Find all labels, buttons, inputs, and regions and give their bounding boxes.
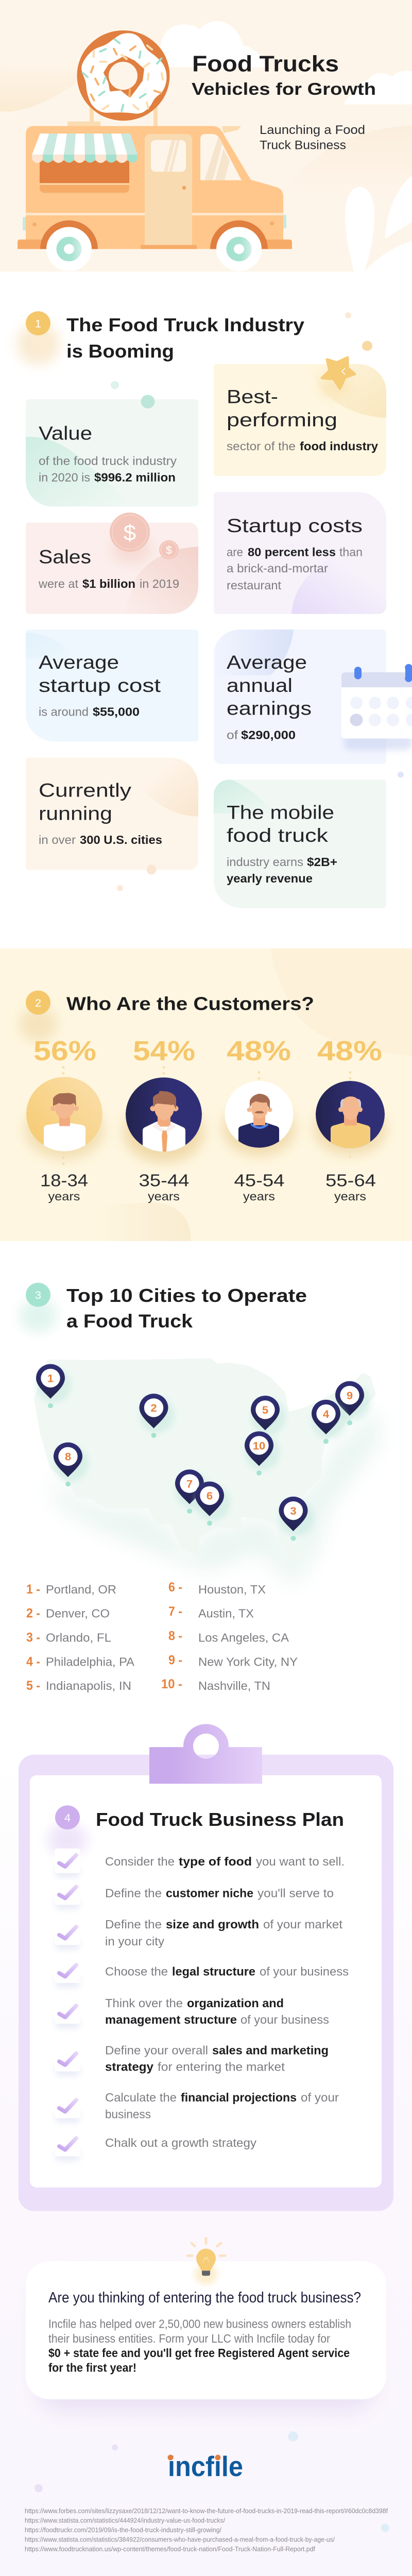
icon: calendar (341, 664, 412, 750)
connector dots (62, 1066, 65, 1165)
legend: cities 1-5: 3 - (26, 1631, 40, 1645)
checklist item 5 (55, 1997, 329, 2028)
card heading: running (39, 803, 112, 824)
panel: value (26, 395, 198, 506)
item text (105, 1997, 329, 2027)
card text: of (227, 729, 238, 742)
visor (222, 126, 241, 133)
card text: in over (39, 834, 76, 847)
connector dots (349, 1071, 351, 1158)
item text: type of food (179, 1855, 252, 1869)
section 1 number badge (16, 311, 60, 365)
card text (39, 706, 140, 719)
cab window (200, 134, 242, 180)
body copy (48, 2318, 351, 2375)
card heading (39, 651, 161, 696)
legend: cities 6-10: Houston, TX (198, 1583, 266, 1597)
pin: 8 Los Angeles (54, 1443, 89, 1486)
section 4 number badge (48, 1805, 87, 1857)
card text: of the food truck industry (39, 455, 177, 468)
pin: 2 Denver (139, 1394, 174, 1438)
decorative dot (398, 772, 404, 777)
card text: in 2020 is (39, 471, 90, 484)
panel: customers background (0, 948, 412, 1241)
panel: sales (26, 513, 198, 614)
pin: 7 Austin (175, 1469, 210, 1514)
card background (26, 399, 198, 506)
item text: financial projections (181, 2091, 297, 2105)
card text: restaurant (227, 579, 281, 592)
icon: large coin (110, 513, 151, 563)
card background (214, 630, 386, 764)
card shadow (36, 2279, 376, 2412)
card text (39, 455, 177, 484)
body copy: for the first year! (48, 2362, 136, 2375)
checkbox (55, 1880, 80, 1909)
card text: $2B+ (307, 856, 337, 869)
section 1 heading: is Booming (66, 341, 174, 362)
item text: Define the (105, 1918, 162, 1931)
awning scallops (32, 155, 138, 163)
legend: cities 1-5: 5 - (26, 1679, 40, 1693)
pin: 5 Indianapolis (251, 1396, 286, 1435)
checkbox (55, 1958, 80, 1988)
pin: 6 Houston (195, 1482, 230, 1526)
checkbox (55, 1849, 80, 1878)
legend: cities 1-5: 4 - (26, 1655, 40, 1669)
pin: 9 New York City: 9 (347, 1389, 353, 1402)
section 1 heading (66, 315, 305, 362)
pin: 10 Nashville: 10 (253, 1439, 265, 1452)
checklist item 4 (55, 1958, 349, 1988)
card heading: performing (227, 409, 337, 430)
lower page background (0, 1757, 412, 2576)
rear wheel (40, 221, 98, 271)
item text: legal structure (172, 1965, 255, 1978)
item text: in your city (105, 1935, 164, 1948)
background hill left (0, 60, 90, 112)
donut sign (77, 30, 170, 121)
cloud right (344, 71, 412, 105)
percentage: 54% (133, 1036, 195, 1066)
food truck illustration (18, 30, 292, 271)
cloud behind title (161, 21, 269, 67)
source links: https://www.statista.com/statistics/384922/consumers-who-have-purchased-a-meal-from-a-food-truck-by-age-us/ (25, 2536, 335, 2544)
panel: mobile food truck (214, 779, 386, 908)
card heading (39, 779, 131, 824)
item text: of your business (241, 2013, 329, 2027)
title: Food Trucks (192, 52, 339, 76)
background blob (98, 1202, 191, 1241)
pin: 10 Nashville (245, 1431, 280, 1476)
card background (214, 779, 386, 908)
card blob (214, 780, 264, 813)
card background (214, 364, 386, 476)
legend: cities 6-10: 10 - (161, 1677, 182, 1691)
checkbox (55, 2132, 80, 2161)
legend: cities 1-5: Portland, OR (46, 1583, 116, 1597)
card heading (227, 386, 337, 430)
checklist item 2 (55, 1880, 334, 1909)
item text: business (105, 2108, 151, 2121)
card background (26, 757, 198, 870)
card blob (237, 630, 294, 675)
subtitle: Truck Business (260, 139, 346, 152)
pin: 8 Los Angeles: 8 (65, 1450, 71, 1463)
source links (25, 2507, 388, 2553)
icon: star (319, 358, 355, 397)
logo: incfile: incfile (168, 2451, 243, 2482)
source links: https://foodtruckr.com/2019/09/is-the-food-truck-industry-still-growing/ (25, 2526, 221, 2534)
age label (40, 1172, 88, 1204)
awning stripes (32, 133, 138, 155)
item text: you want to sell. (256, 1855, 345, 1869)
bumper lights and rivets (18, 215, 292, 249)
item text: strategy (105, 2061, 154, 2074)
card heading: Currently (39, 779, 131, 801)
card background (26, 630, 198, 741)
item text: of your business (260, 1965, 349, 1978)
section 2 number badge: 2 (35, 996, 41, 1009)
legend: cities 6-10: 9 - (168, 1653, 182, 1667)
card text: industry earns (227, 856, 303, 869)
pin: 7 Austin: 7 (186, 1478, 193, 1490)
checklist item 1 (55, 1849, 345, 1878)
decorative leaves (345, 176, 412, 272)
section 1 number badge: 1 (35, 317, 41, 330)
background hill right (286, 126, 412, 272)
panel: average annual earnings (214, 630, 386, 764)
item text: Think over the (105, 1997, 183, 2010)
card text: $290,000 (241, 729, 296, 742)
card heading: Value (39, 422, 92, 444)
card text (38, 578, 179, 591)
title: Vehicles for Growth (192, 80, 376, 99)
age label: years (148, 1190, 180, 1204)
item text: you'll serve to (258, 1887, 334, 1900)
item text (105, 2091, 339, 2121)
card text (227, 856, 337, 886)
card heading: Average (227, 651, 307, 673)
legend: cities 6-10 (161, 1580, 298, 1693)
age label: 35-44 (139, 1172, 190, 1191)
pin: 1 Portland: 1 (47, 1372, 54, 1385)
sprinkles (83, 39, 163, 111)
item text: customer niche (166, 1887, 253, 1900)
section 3 number badge (20, 1283, 57, 1332)
background curve (271, 948, 412, 1056)
avatar shadow (124, 1102, 204, 1162)
body copy: Incfile has helped over 2,50,000 new business owners establish (48, 2318, 351, 2331)
card blob (26, 437, 111, 506)
checklist item 3 (55, 1918, 342, 1950)
card blob (321, 364, 386, 418)
legend: cities 6-10: 7 - (168, 1604, 182, 1619)
card heading (227, 651, 312, 719)
card blob (291, 572, 377, 614)
legend: cities 1-5: Denver, CO (46, 1607, 110, 1621)
service window (40, 161, 129, 183)
item text: Define the (105, 1887, 162, 1900)
card background (26, 522, 198, 614)
decorative dots (111, 312, 372, 389)
item text: Define your overall (105, 2044, 208, 2057)
legend: cities 1-5 (26, 1582, 134, 1693)
front wheel (210, 221, 268, 271)
card text: 300 U.S. cities (80, 834, 162, 847)
percentage: 56% (33, 1036, 96, 1066)
item text (105, 1855, 345, 1869)
age label: years (48, 1190, 80, 1204)
map of the United States (34, 1358, 381, 1586)
section 4 number badge: 4 (64, 1811, 71, 1824)
panel: best-performing (214, 358, 386, 476)
item text: Chalk out a growth strategy (105, 2137, 256, 2150)
counter (40, 183, 129, 193)
connector dots (163, 1066, 165, 1075)
checklist item 6 (55, 2044, 329, 2076)
map shadow (50, 1406, 381, 1586)
card text: food industry (300, 440, 379, 453)
panel: average startup cost (26, 630, 198, 741)
item text (105, 1887, 334, 1900)
avatar (225, 1081, 294, 1148)
legend: cities 1-5: Orlando, FL (46, 1632, 111, 1645)
checklist item 8 (55, 2132, 256, 2161)
checkbox (55, 1999, 80, 2028)
card text: $55,000 (93, 706, 140, 719)
legend: cities 1-5: Philadelphia, PA (46, 1656, 134, 1669)
card text: yearly revenue (227, 872, 313, 886)
card text: are (227, 546, 243, 560)
map outline (34, 1358, 376, 1566)
card heading: startup cost (39, 674, 161, 696)
customer: 18-34 (25, 1036, 104, 1204)
sign poles (67, 106, 158, 127)
item text: of your market (263, 1918, 342, 1931)
legend: cities 1-5: 2 - (26, 1606, 40, 1621)
legend: cities 6-10: New York City, NY (198, 1656, 298, 1669)
card heading: Best- (227, 386, 278, 407)
card text: $1 billion (82, 578, 135, 591)
checklist item 7 (55, 2091, 339, 2123)
pin: 3 Orlando (279, 1497, 314, 1541)
pin: 3 Orlando: 3 (290, 1504, 297, 1517)
card heading (227, 802, 334, 846)
age label: 45-54 (234, 1172, 285, 1191)
decorative dots (117, 865, 157, 891)
icon: large coin: $ (124, 521, 136, 545)
item text: Calculate the (105, 2091, 177, 2105)
legend: cities 1-5: 1 - (26, 1582, 40, 1597)
section 1 heading: The Food Truck Industry (66, 315, 305, 335)
legend: cities 1-5: Indianapolis, IN (46, 1680, 131, 1693)
avatar shadow (223, 1101, 295, 1156)
avatar (126, 1077, 202, 1152)
avatar shadow (314, 1103, 386, 1155)
item text (105, 2044, 329, 2074)
panel: clipboard (19, 1724, 393, 2211)
card background (26, 2261, 386, 2399)
item text: organization and (187, 1997, 284, 2010)
legend: cities 6-10: 6 - (168, 1580, 182, 1595)
age label (325, 1172, 376, 1204)
subtitle: Launching a Food (260, 123, 365, 137)
pin: 9 New York City (335, 1381, 370, 1426)
pin: 2 Denver: 2 (150, 1401, 157, 1414)
age label (139, 1172, 190, 1204)
pin: 5 Indianapolis: 5 (262, 1403, 268, 1416)
card text (39, 834, 162, 847)
section 2 number badge (20, 991, 57, 1041)
icon: small coin: $ (166, 544, 172, 556)
checkbox (55, 2047, 80, 2076)
legend: cities 6-10: Los Angeles, CA (198, 1632, 289, 1645)
section 2 heading: Who Are the Customers? (66, 993, 314, 1014)
card text: 80 percent less (248, 546, 336, 560)
customer: 55-64 (314, 1036, 386, 1204)
clipboard clip (149, 1724, 262, 1784)
item text: of your (301, 2091, 339, 2105)
subtitle (260, 123, 365, 152)
age label (234, 1172, 284, 1204)
pin: 1 Portland (36, 1364, 71, 1408)
legend: cities 6-10: Nashville, TN (198, 1680, 270, 1693)
question: Are you thinking of entering the food truck business? (48, 2290, 361, 2306)
item text: sales and marketing (212, 2044, 329, 2057)
section 3 heading: a Food Truck (66, 1311, 193, 1331)
pin: 4 Philadelphia: 4 (323, 1408, 329, 1420)
section 3 heading: Top 10 Cities to Operate (66, 1285, 307, 1306)
card text: $996.2 million (94, 471, 176, 484)
body copy: their business entities. Form your LLC with Incfile today for (48, 2332, 330, 2346)
avatar (26, 1077, 102, 1151)
age label: 18-34 (40, 1172, 88, 1191)
panel: currently running (26, 757, 198, 870)
card heading: annual (227, 674, 293, 696)
header background (0, 0, 412, 272)
teal bubble (141, 395, 154, 409)
percentage: 48% (227, 1036, 291, 1066)
avatar (316, 1081, 385, 1148)
card text: in 2019 (140, 578, 179, 591)
section 3 heading (66, 1285, 307, 1331)
section 4 heading: Food Truck Business Plan (96, 1809, 344, 1830)
item text: size and growth (166, 1918, 259, 1931)
section 3 number badge: 3 (35, 1289, 41, 1301)
pin: 6 Houston: 6 (207, 1489, 213, 1502)
card blob (133, 547, 198, 614)
card text (227, 440, 379, 453)
age label: 55-64 (325, 1172, 376, 1191)
card blob (151, 761, 198, 816)
panel: call to action (26, 2261, 386, 2412)
card heading: Sales (39, 546, 91, 567)
card heading: Startup costs (227, 515, 363, 536)
legend: cities 6-10: Austin, TX (198, 1607, 254, 1621)
pin: 4 Philadelphia (312, 1400, 347, 1444)
card blob (26, 633, 45, 646)
source links: https://www.statista.com/statistics/444924/industry-value-us-food-trucks/ (25, 2517, 225, 2524)
checkbox (55, 1920, 80, 1950)
age label: years (334, 1190, 366, 1204)
card text: than (339, 546, 363, 560)
item text: Choose the (105, 1965, 168, 1978)
card heading: Average (39, 651, 119, 673)
item text (105, 1965, 349, 1978)
card text (227, 546, 363, 592)
clipboard paper (30, 1775, 382, 2188)
icon: light bulb (187, 2238, 225, 2284)
door (141, 134, 197, 249)
item text (105, 1918, 342, 1948)
card heading: earnings (227, 698, 312, 719)
source links: https://www.forbes.com/sites/lizzysaxe/2018/12/12/want-to-know-the-future-of-food-trucks-in-2019-read-this-report/#60dc0c8d398f (25, 2507, 388, 2515)
item text: management structure (105, 2013, 237, 2027)
card background (214, 492, 386, 614)
icon: small coin (159, 540, 179, 560)
percentage: 48% (317, 1036, 382, 1066)
card text: a brick-and-mortar (227, 562, 328, 575)
item text: Consider the (105, 1855, 175, 1869)
age label: years (243, 1190, 275, 1204)
source links: https://www.foodtrucknation.us/wp-content/themes/food-truck-nation/Food-Truck-Nation-Full-Report.pdf (25, 2545, 315, 2553)
connector dots (258, 1071, 261, 1080)
body copy: $0 + state fee and you'll get free Registered Agent service (48, 2347, 350, 2360)
card heading: The mobile (227, 802, 334, 823)
panel: startup costs (214, 492, 386, 614)
card text: were at (38, 578, 78, 591)
belt line (26, 213, 283, 215)
title (192, 52, 376, 99)
avatar shadow (25, 1100, 104, 1159)
clipboard board (19, 1755, 393, 2211)
card text: is around (39, 706, 89, 719)
card text: sector of the (227, 440, 296, 453)
legend: cities 6-10: 8 - (168, 1629, 182, 1643)
customer: 35-44 (124, 1036, 204, 1204)
decorative dots (35, 2431, 389, 2532)
truck body (26, 126, 283, 249)
customer: 45-54 (223, 1036, 295, 1204)
item text: for entering the market (158, 2061, 285, 2074)
checkbox (55, 2094, 80, 2123)
card heading: food truck (227, 825, 328, 846)
